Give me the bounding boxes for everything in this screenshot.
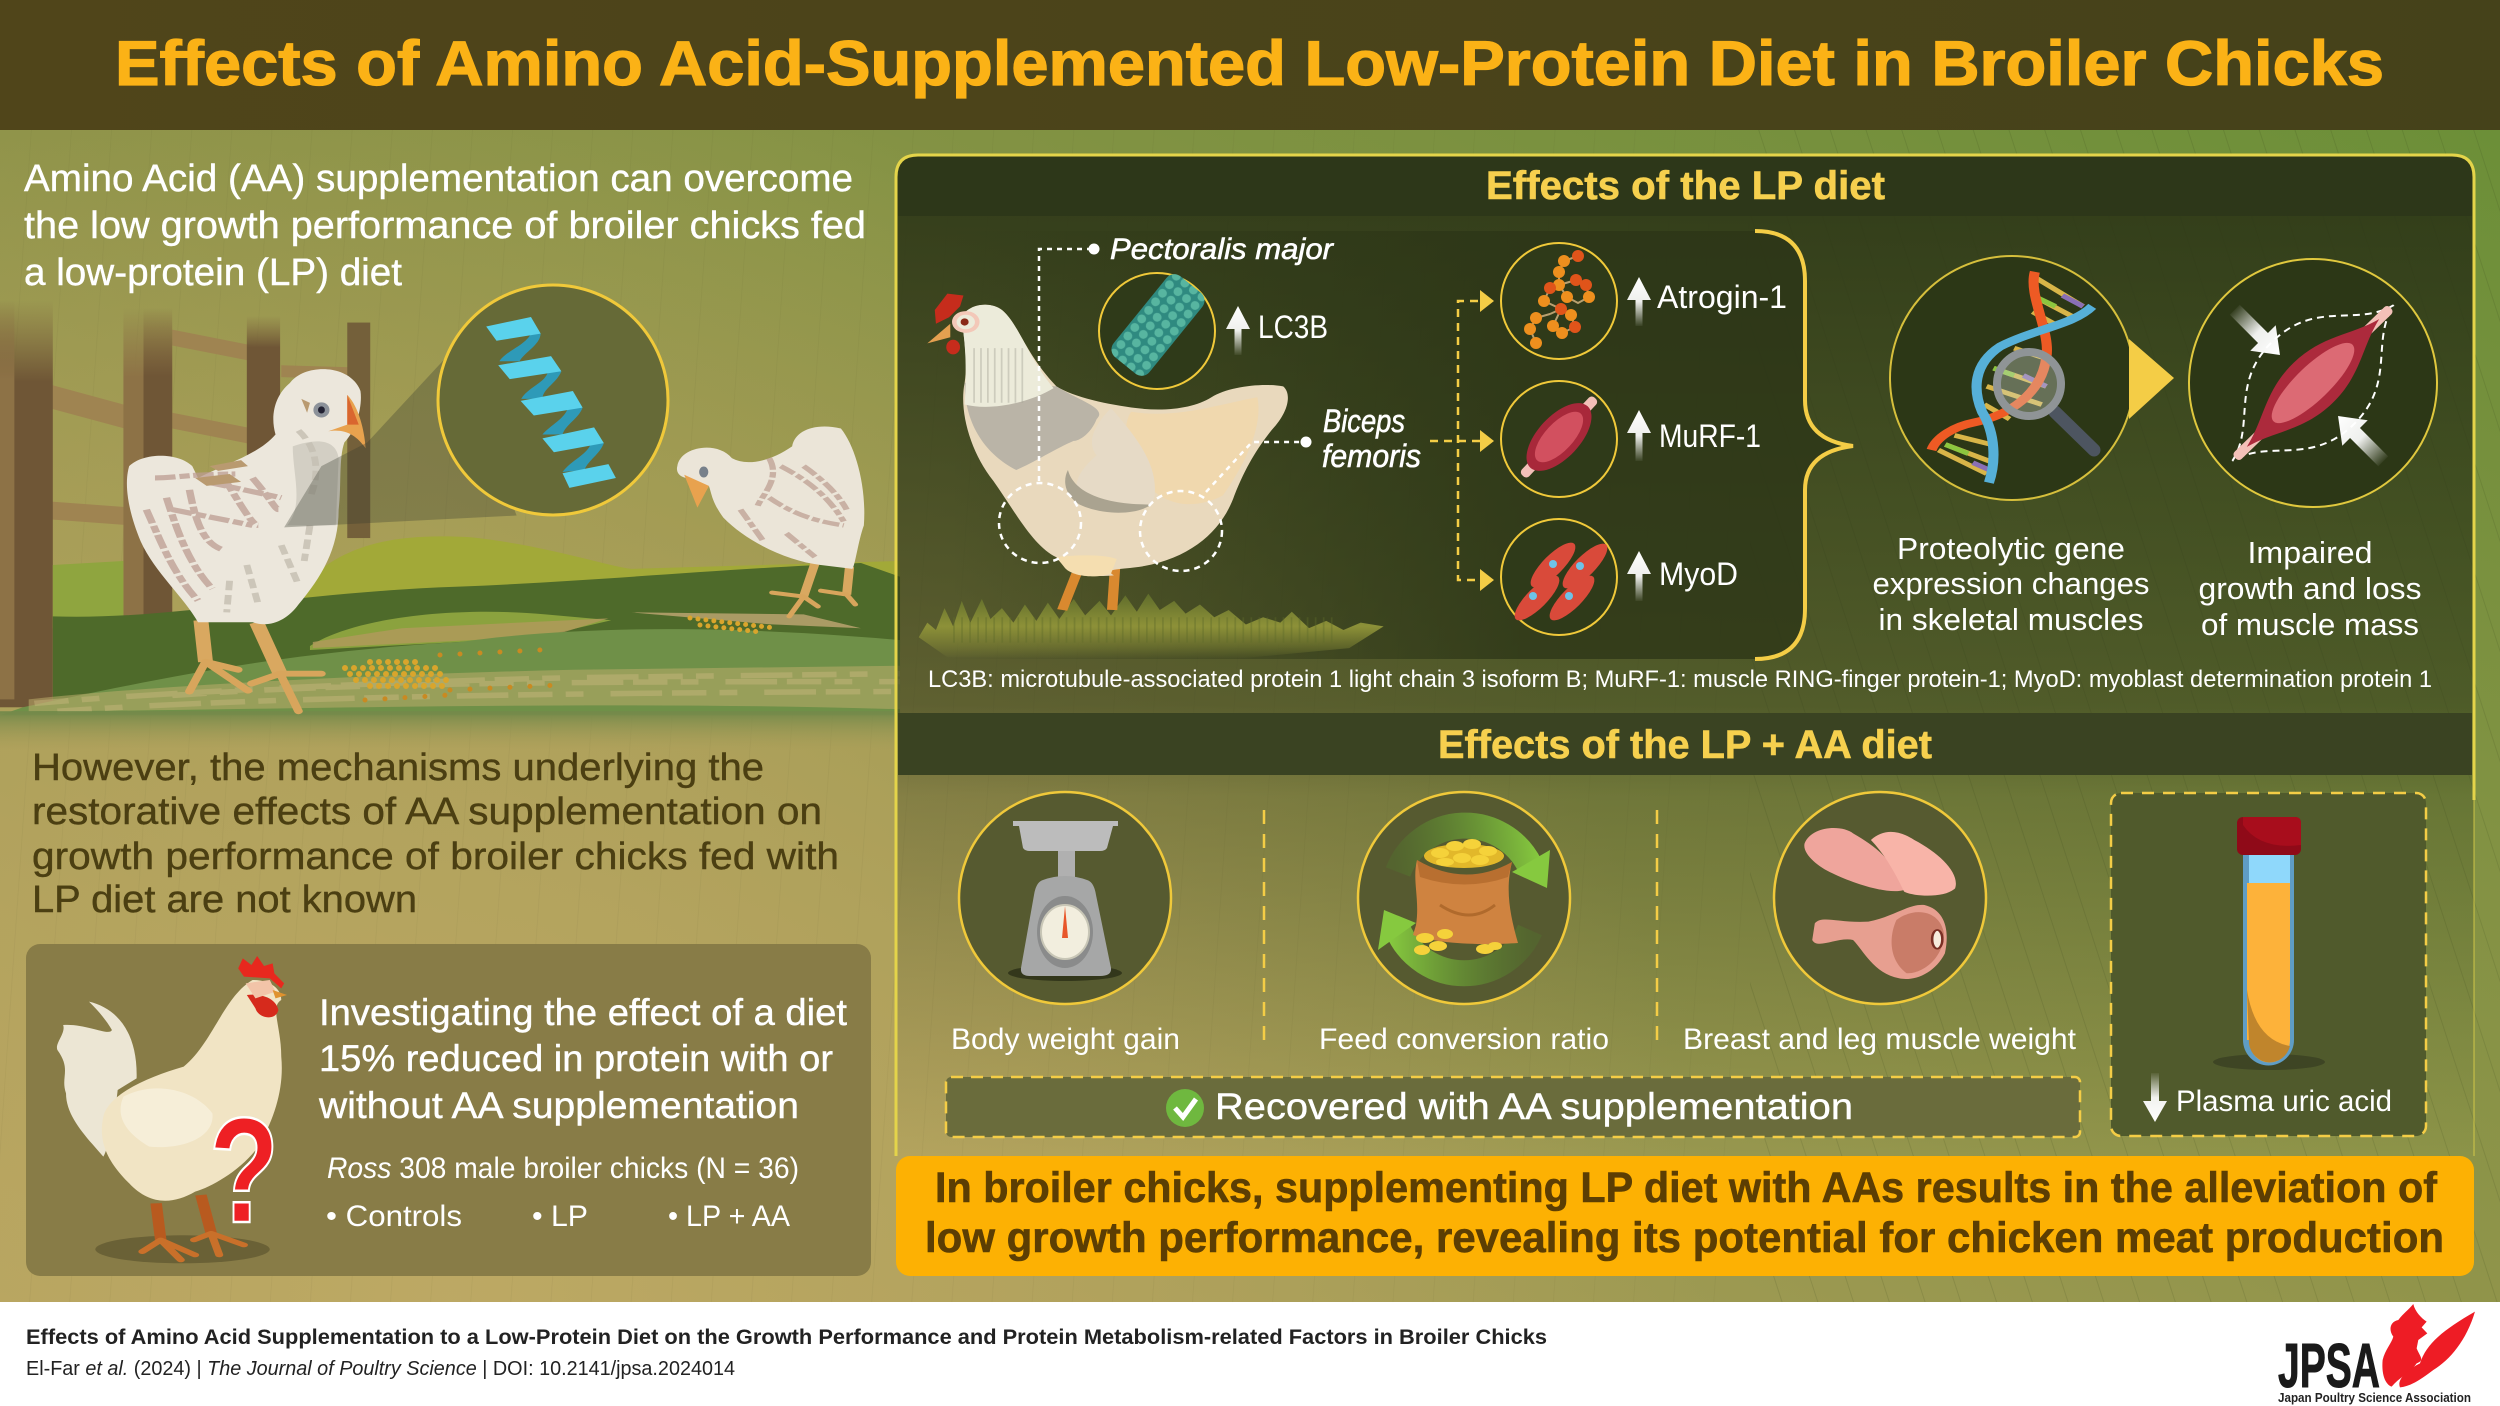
icon: myoblast cells: [1501, 519, 1617, 635]
label: MyoD up: [1627, 551, 1738, 601]
text: knowledge gap: restorative effects of AA supplementation on: [32, 791, 822, 833]
text: impaired growth: growth and loss: [2198, 571, 2422, 606]
panel: plasma uric acid: [2111, 793, 2426, 1136]
citation: [26, 1326, 1547, 1380]
text: proteolytic gene expression: expression changes: [1872, 566, 2150, 601]
text: proteolytic gene expression: in skeletal muscles: [1878, 602, 2144, 637]
text: knowledge gap: LP diet are not known: [32, 879, 417, 921]
big chick: [127, 369, 366, 711]
text: study groups: • Controls: [326, 1200, 462, 1233]
footer: [0, 1302, 2500, 1406]
text: proteolytic gene expression: [1872, 531, 2150, 637]
text: knowledge gap: [32, 747, 839, 921]
heading band: LP diet: [898, 157, 2472, 216]
heading band: LP + AA diet: Effects of the LP + AA diet: [1438, 723, 1932, 767]
text: impaired growth: [2198, 535, 2422, 642]
label: body weight gain: Body weight gain: [951, 1023, 1180, 1056]
icon: check mark: [1166, 1089, 1204, 1127]
circle: amino acid helix: [438, 285, 668, 515]
icon: hen with sampled muscles: [919, 294, 1384, 659]
panel: study design: [26, 944, 871, 1276]
text: study aim: [318, 992, 848, 1126]
text: study groups: [326, 1152, 799, 1233]
arrow: down: [2143, 1073, 2167, 1122]
ground and grass: [0, 536, 900, 750]
label: feed conversion ratio: Feed conversion ratio: [1319, 1023, 1609, 1056]
icon: DNA with magnifier: [1890, 256, 2134, 500]
label: MyoD up: MyoD: [1659, 556, 1738, 592]
heading band: LP + AA diet: [898, 713, 2472, 775]
icon: feed sack with cycle arrows: [1358, 792, 1570, 1004]
conclusion box: In broiler chicks, supplementing LP diet with AAs results in the alleviation of: [935, 1164, 2438, 1212]
callout: recovered with AA supplementation: [946, 1077, 2080, 1137]
text: study groups: • LP: [532, 1200, 588, 1233]
icon: rooster with question mark: ?: [209, 1086, 279, 1254]
callout: biceps femoris: Biceps: [1323, 403, 1405, 439]
icon: rooster with question mark: [57, 956, 287, 1263]
gene expression box with bracket: [950, 231, 1853, 659]
text: study aim: Investigating the effect of a diet: [319, 992, 848, 1033]
label: LC3B up: [1226, 306, 1328, 355]
icon: atrogin molecule: [1501, 243, 1617, 359]
text: introduction: Amino Acid (AA) supplementation can overcome: [24, 158, 853, 200]
text: introduction: [24, 158, 866, 294]
label: LC3B up: LC3B: [1258, 309, 1328, 345]
farm scene illustration: [0, 285, 900, 750]
magnification cone: [284, 349, 517, 527]
text: study groups: Ross 308 male broiler chicks (N = 36): [327, 1152, 799, 1185]
dashed dividers: [1264, 810, 1657, 1050]
callout: biceps femoris: femoris: [1322, 438, 1421, 474]
callout: pectoralis major: Pectoralis major: [1110, 233, 1334, 266]
label: MuRF-1 up: [1627, 410, 1761, 461]
text: study aim: 15% reduced in protein with or: [319, 1038, 833, 1079]
fence: [0, 300, 370, 707]
callout: pectoralis major: [1039, 233, 1334, 481]
logo: JPSA: JPSA: [2278, 1332, 2380, 1401]
arrow: to muscle loss: [2129, 339, 2174, 419]
title banner: [0, 0, 2500, 130]
text: introduction: a low-protein (LP) diet: [24, 252, 402, 294]
text: knowledge gap: growth performance of broiler chicks fed with: [32, 836, 839, 878]
conclusion box: [896, 1156, 2474, 1276]
icon: muscle atrophy: [2189, 259, 2437, 507]
panel: plasma uric acid: Plasma uric acid: [2176, 1085, 2392, 1118]
icon: muscle: [1501, 381, 1617, 497]
label: Atrogin-1 up: [1627, 277, 1787, 326]
panel: effects of diets: [896, 155, 2474, 1156]
text: study groups: • LP + AA: [668, 1200, 790, 1233]
text: abbreviations: LC3B: microtubule-associated protein 1 light chain 3 isoform B; MuRF-1: muscle RING-finger protein-1; MyoD: myoblast determination protein 1: [928, 666, 2432, 693]
corn grains: [345, 618, 775, 700]
label: muscle weight: Breast and leg muscle weight: [1683, 1023, 2077, 1056]
citation: El-Far et al. (2024) | The Journal of Poultry Science | DOI: 10.2141/jpsa.2024014: [26, 1358, 735, 1380]
text: introduction: the low growth performance of broiler chicks fed: [24, 205, 866, 247]
logo: JPSA: Japan Poultry Science Association: [2278, 1391, 2471, 1405]
text: proteolytic gene expression: Proteolytic gene: [1897, 531, 2125, 566]
conclusion box: low growth performance, revealing its potential for chicken meat production: [925, 1214, 2444, 1262]
callout: recovered with AA supplementation: Recovered with AA supplementation: [1215, 1086, 1853, 1127]
callout: biceps femoris: [1206, 403, 1421, 492]
title: Effects of Amino Acid-Supplemented Low-Protein Diet in Broiler Chicks: [115, 29, 2384, 99]
icon: LC3B protein: [1099, 270, 1215, 389]
label: Atrogin-1 up: Atrogin-1: [1657, 279, 1787, 315]
text: knowledge gap: However, the mechanisms underlying the: [32, 747, 764, 789]
heading band: LP diet: Effects of the LP diet: [1486, 164, 1885, 208]
small chick: [677, 427, 864, 616]
text: study aim: without AA supplementation: [318, 1085, 799, 1126]
label: MuRF-1 up: MuRF-1: [1659, 418, 1761, 454]
text: impaired growth: Impaired: [2248, 535, 2372, 570]
citation: Effects of Amino Acid Supplementation to a Low-Protein Diet on the Growth Performance and Protein Metabolism-related Factors in Broiler Chicks: [26, 1326, 1547, 1349]
logo: JPSA: [2278, 1304, 2475, 1405]
text: impaired growth: of muscle mass: [2201, 607, 2419, 642]
icon: chicken meat: [1774, 792, 1986, 1004]
icon: weighing scale: [959, 792, 1171, 1004]
yellow dashed connector arrows: [1430, 290, 1494, 591]
icon: blood tube: [2213, 817, 2325, 1070]
